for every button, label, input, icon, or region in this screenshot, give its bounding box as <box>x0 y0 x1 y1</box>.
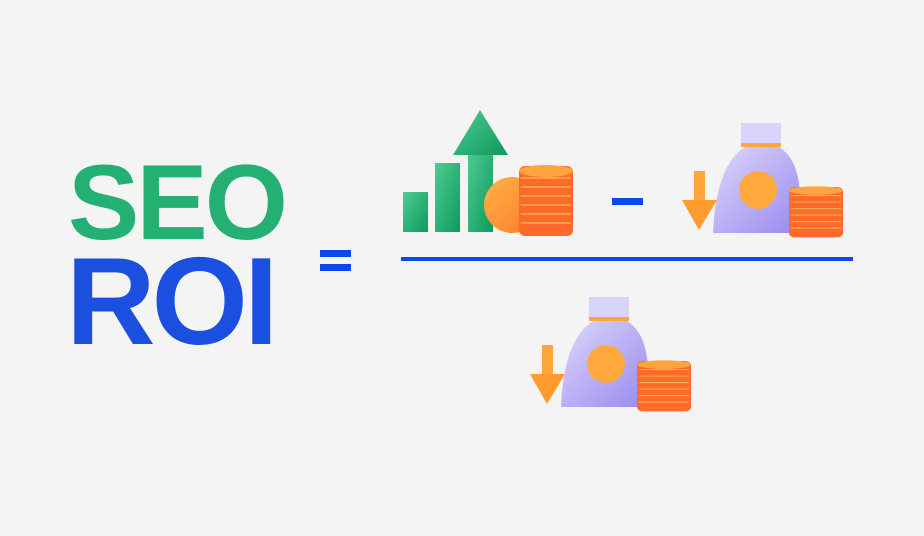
title: SEO: SEO <box>68 142 285 262</box>
cost group top <box>682 123 843 237</box>
icon: gold coin <box>484 177 540 233</box>
minus sign <box>612 198 643 205</box>
cost group bottom <box>530 297 691 411</box>
fraction line <box>401 257 853 261</box>
title: ROI: ROI <box>66 233 274 371</box>
icon: growth chart <box>403 110 508 232</box>
equals sign <box>320 250 351 271</box>
icon: coin stack <box>519 165 573 236</box>
